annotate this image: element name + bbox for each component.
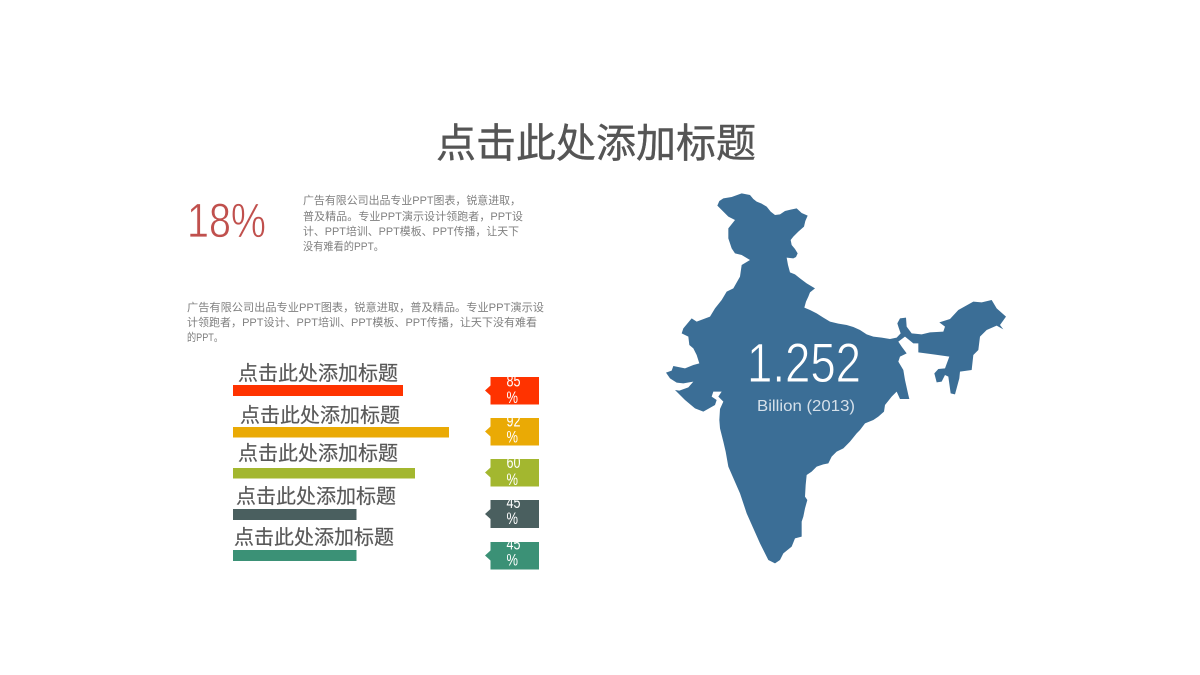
text block: stat description: 广告有限公司出品专业PPT图表，锐意进取， bbox=[303, 193, 521, 207]
bar row 2: 点击此处添加标题 bbox=[240, 404, 400, 427]
bar row 3 bbox=[233, 442, 415, 478]
stat: 18%: 18% bbox=[187, 195, 266, 248]
text block: stat description: 没有难看的PPT。 bbox=[303, 239, 384, 253]
map caption: Billion (2013): Billion (2013) bbox=[757, 398, 855, 415]
tag: 45% dark: 45 bbox=[506, 494, 520, 512]
tag: 60%: 60 bbox=[506, 454, 520, 472]
tag: 45% dark bbox=[485, 500, 539, 528]
text block: intro paragraph: 的PPT。 bbox=[187, 330, 223, 344]
tag: 85%: % bbox=[506, 389, 518, 407]
tag: 60% bbox=[485, 459, 539, 486]
tag: 92% bbox=[485, 418, 539, 446]
tag: 60%: % bbox=[506, 471, 518, 489]
text block: stat description: 计、PPT培训、PPT模板、PPT传播，让天下 bbox=[303, 224, 519, 238]
tag: 92%: % bbox=[506, 428, 518, 446]
tag: 85% bbox=[485, 377, 539, 404]
bar row 1 bbox=[233, 362, 403, 396]
bar row 3: 点击此处添加标题 bbox=[238, 442, 398, 465]
title: 点击此处添加标题 bbox=[436, 122, 756, 166]
text block: intro paragraph bbox=[187, 300, 544, 344]
bar row 2 bbox=[233, 404, 449, 438]
tag: 45% dark: % bbox=[506, 510, 518, 528]
bar row 1: 点击此处添加标题 bbox=[238, 362, 398, 385]
bar row 4 bbox=[233, 485, 396, 520]
text block: intro paragraph: 广告有限公司出品专业PPT图表，锐意进取，普及精品。专业PPT演示设 bbox=[187, 300, 544, 314]
bar row 5 bbox=[233, 526, 394, 561]
tag: 45% green: % bbox=[506, 552, 518, 570]
map value: 1.252: 1.252 bbox=[747, 331, 861, 394]
tag: 45% green: 45 bbox=[506, 536, 520, 554]
map: India bbox=[666, 193, 1006, 563]
bar row 4: 点击此处添加标题 bbox=[236, 485, 396, 508]
tag: 92%: 92 bbox=[506, 412, 520, 430]
bar row 5: 点击此处添加标题 bbox=[234, 526, 394, 549]
tag: 85%: 85 bbox=[506, 372, 520, 390]
text block: intro paragraph: 计领跑者，PPT设计、PPT培训、PPT模板、PPT传播，让天下没有难看 bbox=[187, 315, 537, 329]
text block: stat description: 普及精品。专业PPT演示设计领跑者，PPT设 bbox=[303, 209, 523, 223]
text block: stat description bbox=[303, 193, 523, 253]
tag: 45% green bbox=[485, 542, 539, 570]
